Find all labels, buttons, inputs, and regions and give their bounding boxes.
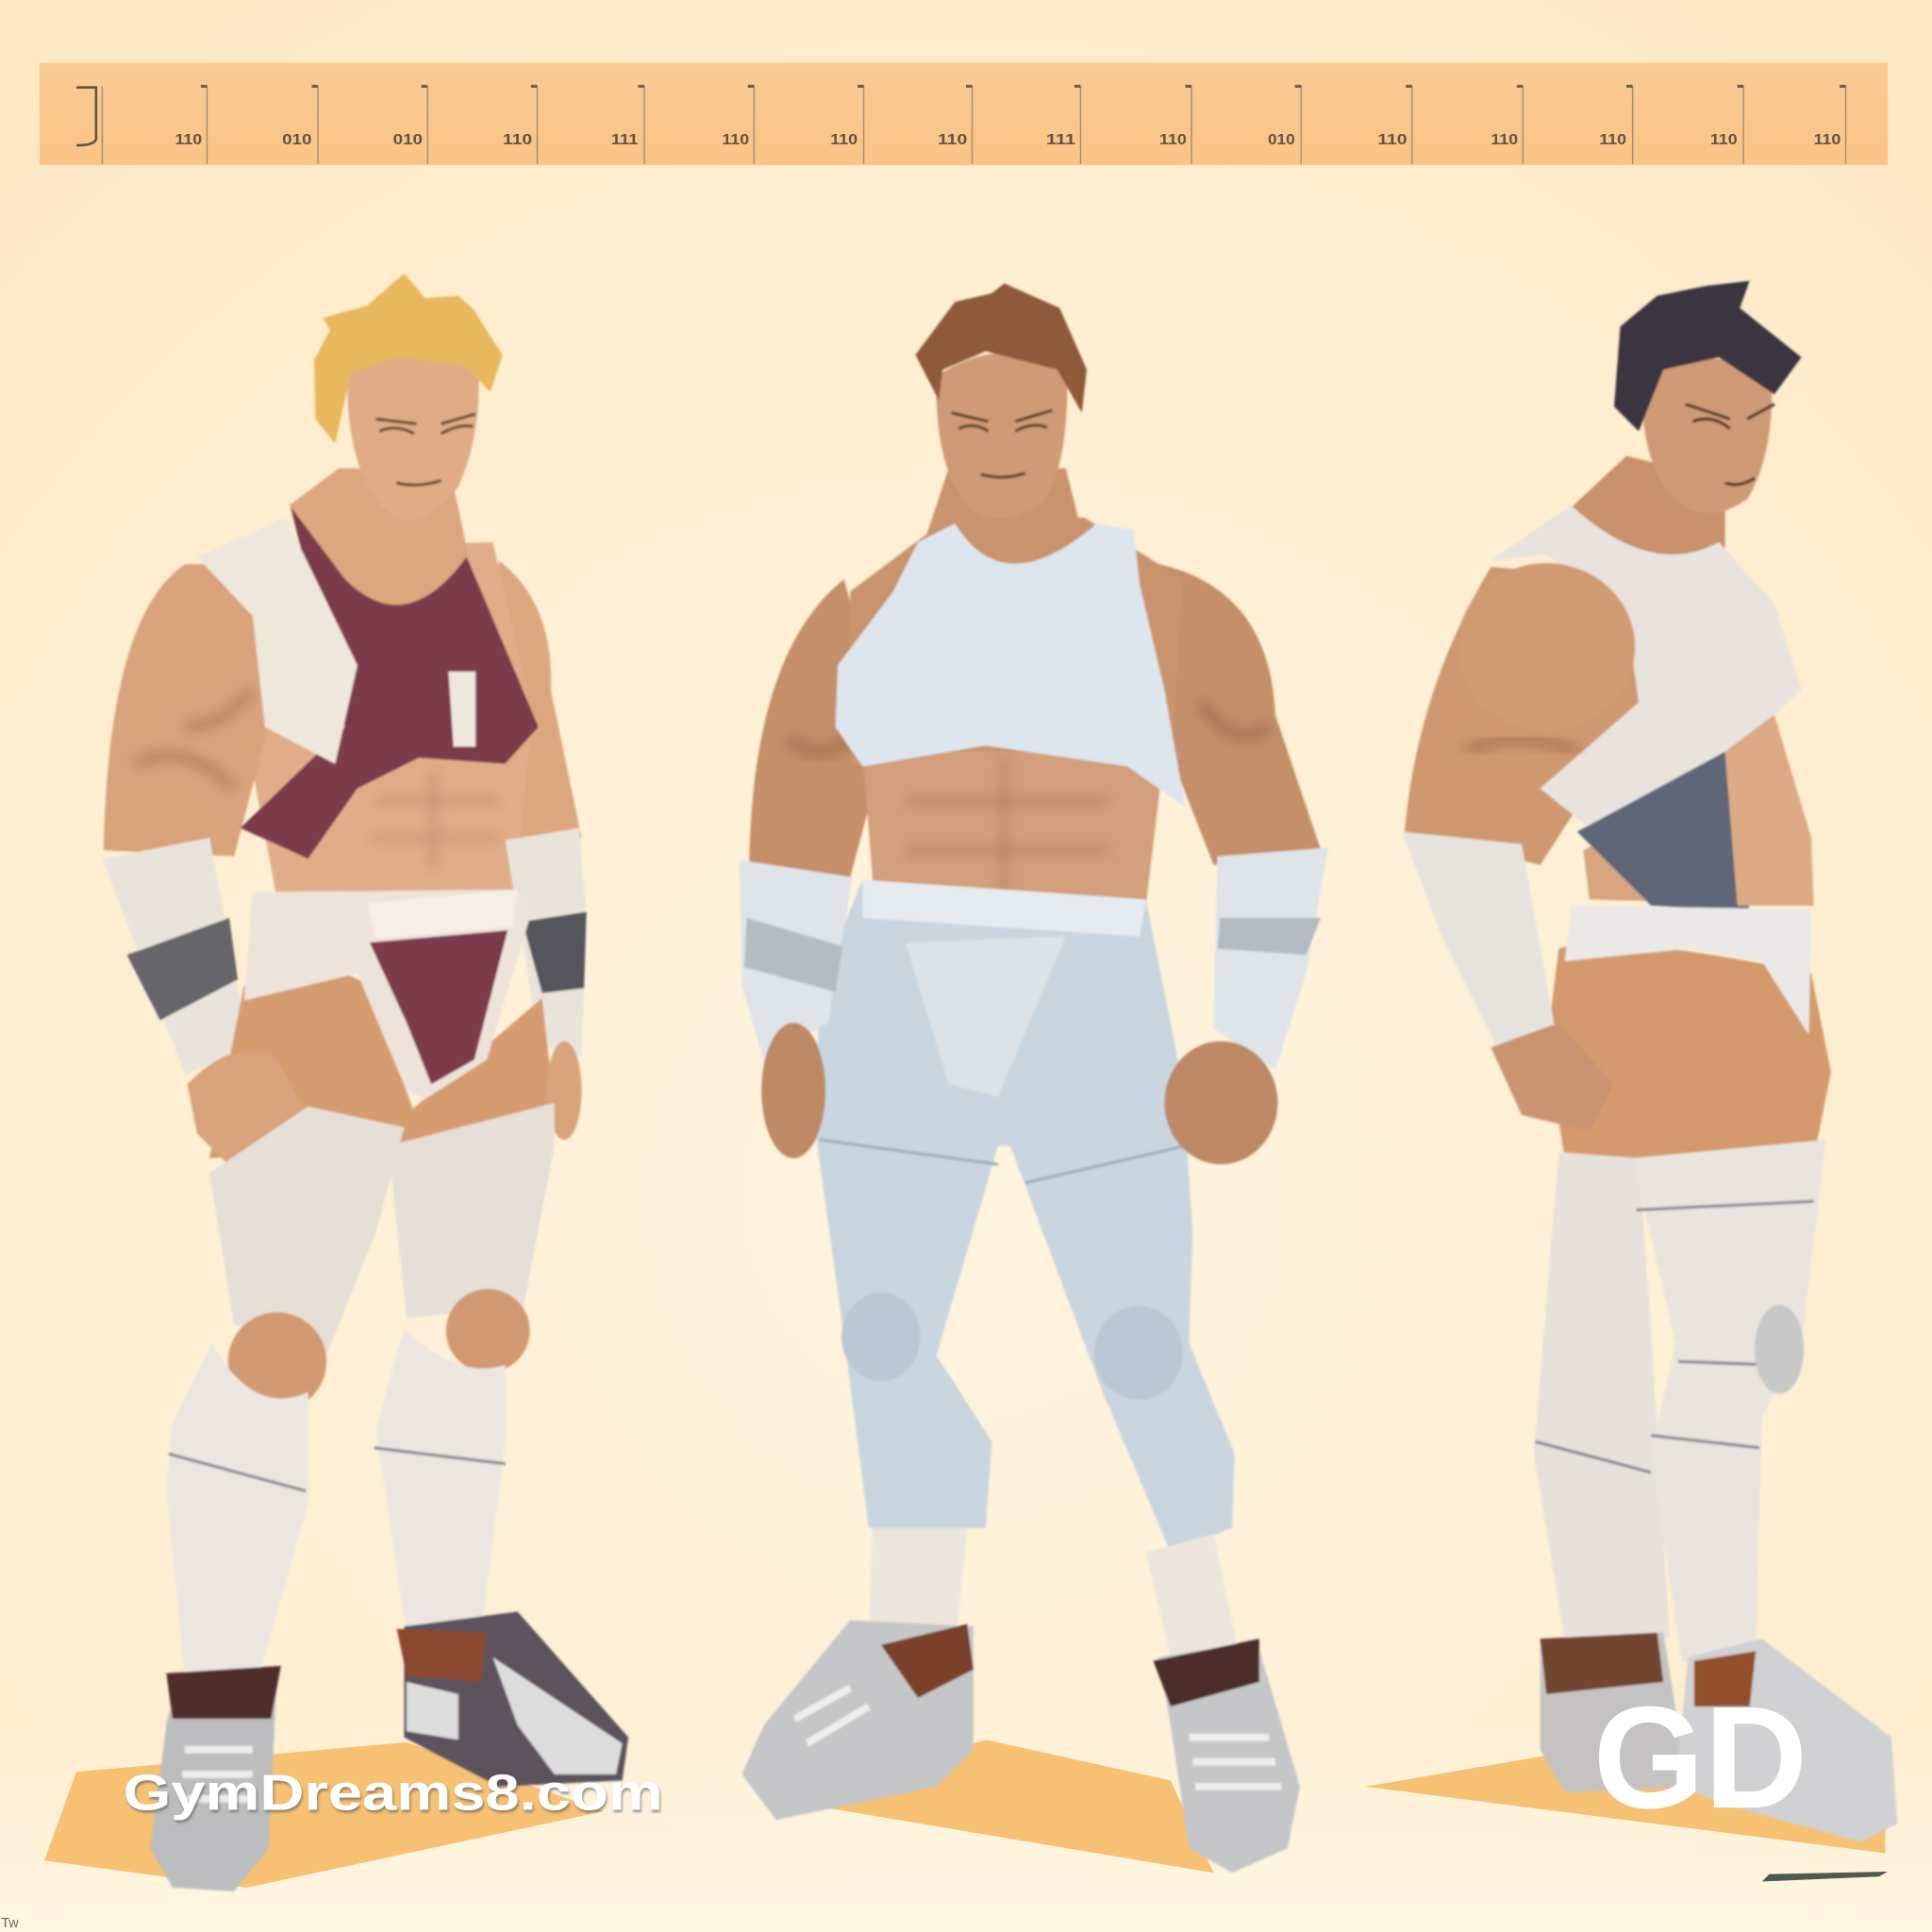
figure 2: brown-haired athlete [740,283,1328,1873]
face [375,414,475,485]
pants seams [820,1140,1185,1183]
shoe left strap [881,1624,974,1698]
ruler: 110 [1491,132,1518,148]
neck [1571,456,1725,566]
wraps [740,848,1328,1070]
torso [862,752,1164,906]
shorts panel [370,930,508,1084]
hand [1491,1023,1614,1131]
floor mat left [44,1742,604,1888]
ruler: 010 [1268,132,1295,148]
arm shading [1466,740,1577,752]
logo: GD: GD [1593,1675,1807,1839]
signature mark [1762,1872,1888,1881]
ruler: 110 [1814,132,1841,148]
shoe right highlights [407,1657,623,1774]
floor mat center [789,1740,1214,1873]
shoe right strap [1154,1639,1259,1707]
thighs [209,967,555,1158]
tank top [1491,506,1802,828]
shorts [1565,906,1811,1035]
hair [1614,281,1802,431]
tank side panel [197,518,358,764]
shoe left strap [166,1666,281,1719]
shoe right laces [1189,1738,1281,1787]
wrist wrap left [102,838,249,1074]
wrap [1402,832,1555,1047]
neck [290,468,468,605]
wrap bands [744,918,1321,991]
ruler: 110 [938,132,968,148]
dark band left [127,918,238,1020]
abdominal shading [906,758,1109,899]
hands [761,1023,1277,1164]
torso [246,542,532,899]
ruler: 110 [1710,132,1738,148]
neck [924,468,1084,585]
chest and shoulders [850,518,1183,764]
shorts waistband [367,890,518,939]
shoe left laces [794,1688,869,1743]
face [1686,404,1774,485]
ruler: 111 [1046,132,1076,148]
far arm [491,560,581,844]
pants waistband [862,880,1146,937]
leg stripes [1535,1201,1814,1473]
knee pads [841,1292,1183,1400]
ruler [40,63,1888,165]
ruler: 110 [722,132,749,148]
front leg [1633,1140,1826,1663]
shoe left [150,1670,277,1891]
ruler: 010 [282,132,312,148]
arm [1405,567,1651,865]
pants [816,880,1235,1553]
corner mark: Tw [1,1916,19,1931]
floor mat right [1365,1755,1885,1853]
head [347,349,479,520]
crop top [836,524,1185,808]
near arm shading [136,690,253,789]
shoe left [741,1621,974,1820]
shoulder [1457,563,1635,731]
near arm [104,564,290,857]
watermark: site name: GymDreams8.com [124,1766,663,1822]
shoe right strap [397,1629,487,1682]
ruler: 110 [1159,132,1187,148]
ruler: 110 [1599,132,1626,148]
pants panel [906,937,1066,1096]
hair [915,283,1087,413]
shoe back strap [1541,1633,1663,1694]
hand left [188,1052,308,1171]
ruler: 110 [175,132,203,148]
dark band right [523,912,587,993]
figure 1: blond athlete [102,274,628,1891]
hips and thighs [1546,943,1831,1171]
shorts [244,890,530,1099]
arm shading [789,702,1269,752]
ruler: 111 [611,132,639,148]
shoe back [1541,1633,1688,1792]
tank chest mark [448,672,475,747]
socks [869,1528,1239,1657]
shoe left laces [182,1750,253,1799]
knee socks upper [209,1103,555,1356]
back leg [1534,1152,1670,1639]
shoe right [1158,1641,1300,1873]
tank top [241,503,539,858]
knee pad [1755,1305,1804,1393]
shoe front [1675,1639,1897,1842]
sock stripes [169,1448,506,1491]
dark panel [1577,752,1750,912]
shoe right [404,1611,628,1787]
hand right [547,1041,581,1140]
ruler: 110 [830,132,858,148]
ruler: 110 [1377,132,1407,148]
shoe front strap [1694,1651,1756,1707]
lower socks [166,1328,506,1675]
abs [1725,715,1814,906]
wrist wrap right [506,828,587,1058]
ruler: 110 [503,132,533,148]
abdominal shading [370,770,499,869]
waist [1583,764,1811,906]
arms [749,560,1321,877]
head [936,353,1067,518]
head [1641,358,1772,513]
figure 3: dark-haired athlete [1402,281,1897,1842]
face [951,410,1052,477]
hair [314,274,503,443]
knees [228,1289,530,1411]
ruler: 010 [393,132,423,148]
